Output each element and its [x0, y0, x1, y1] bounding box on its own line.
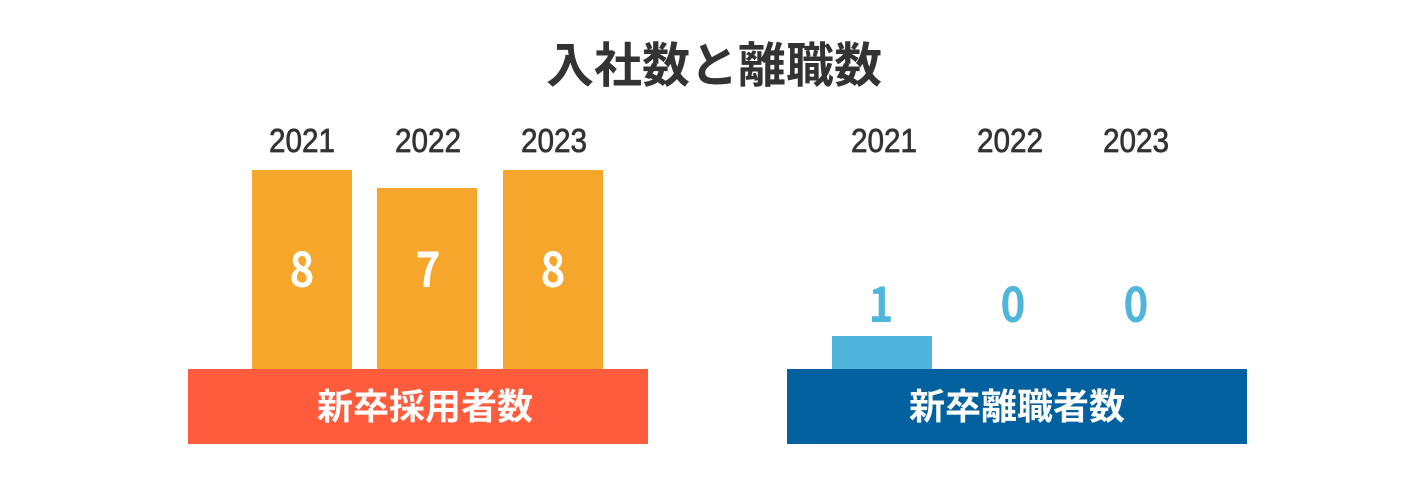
year label 2022: 2022: [395, 122, 461, 159]
bar 2021: 8: [290, 231, 314, 301]
panel: new graduate departures: [787, 122, 1247, 444]
bar 2022: 7: [416, 231, 440, 301]
base label: departures: [787, 369, 1247, 444]
year label 2023: 2023: [1102, 122, 1169, 159]
bar 2021: [252, 170, 352, 369]
bar 2021: [832, 336, 932, 369]
bar 2023: [503, 170, 603, 369]
title: 入社数と離職数: [546, 26, 882, 96]
value 1: 1: [869, 266, 893, 336]
year label 2022: 2022: [977, 122, 1043, 159]
year label 2021: 2021: [851, 122, 917, 159]
year label 2023: 2023: [520, 122, 587, 159]
value 0: 0: [1001, 266, 1025, 336]
base label: hires: [188, 369, 648, 444]
value 0: 0: [1124, 266, 1148, 336]
bar 2023: 8: [541, 231, 565, 301]
panel: new graduate hires: [188, 122, 648, 444]
year label 2021: 2021: [269, 122, 335, 159]
base label: departures: 新卒離職者数: [909, 378, 1125, 430]
bar 2022: [377, 188, 477, 369]
base label: hires: 新卒採用者数: [317, 378, 533, 430]
